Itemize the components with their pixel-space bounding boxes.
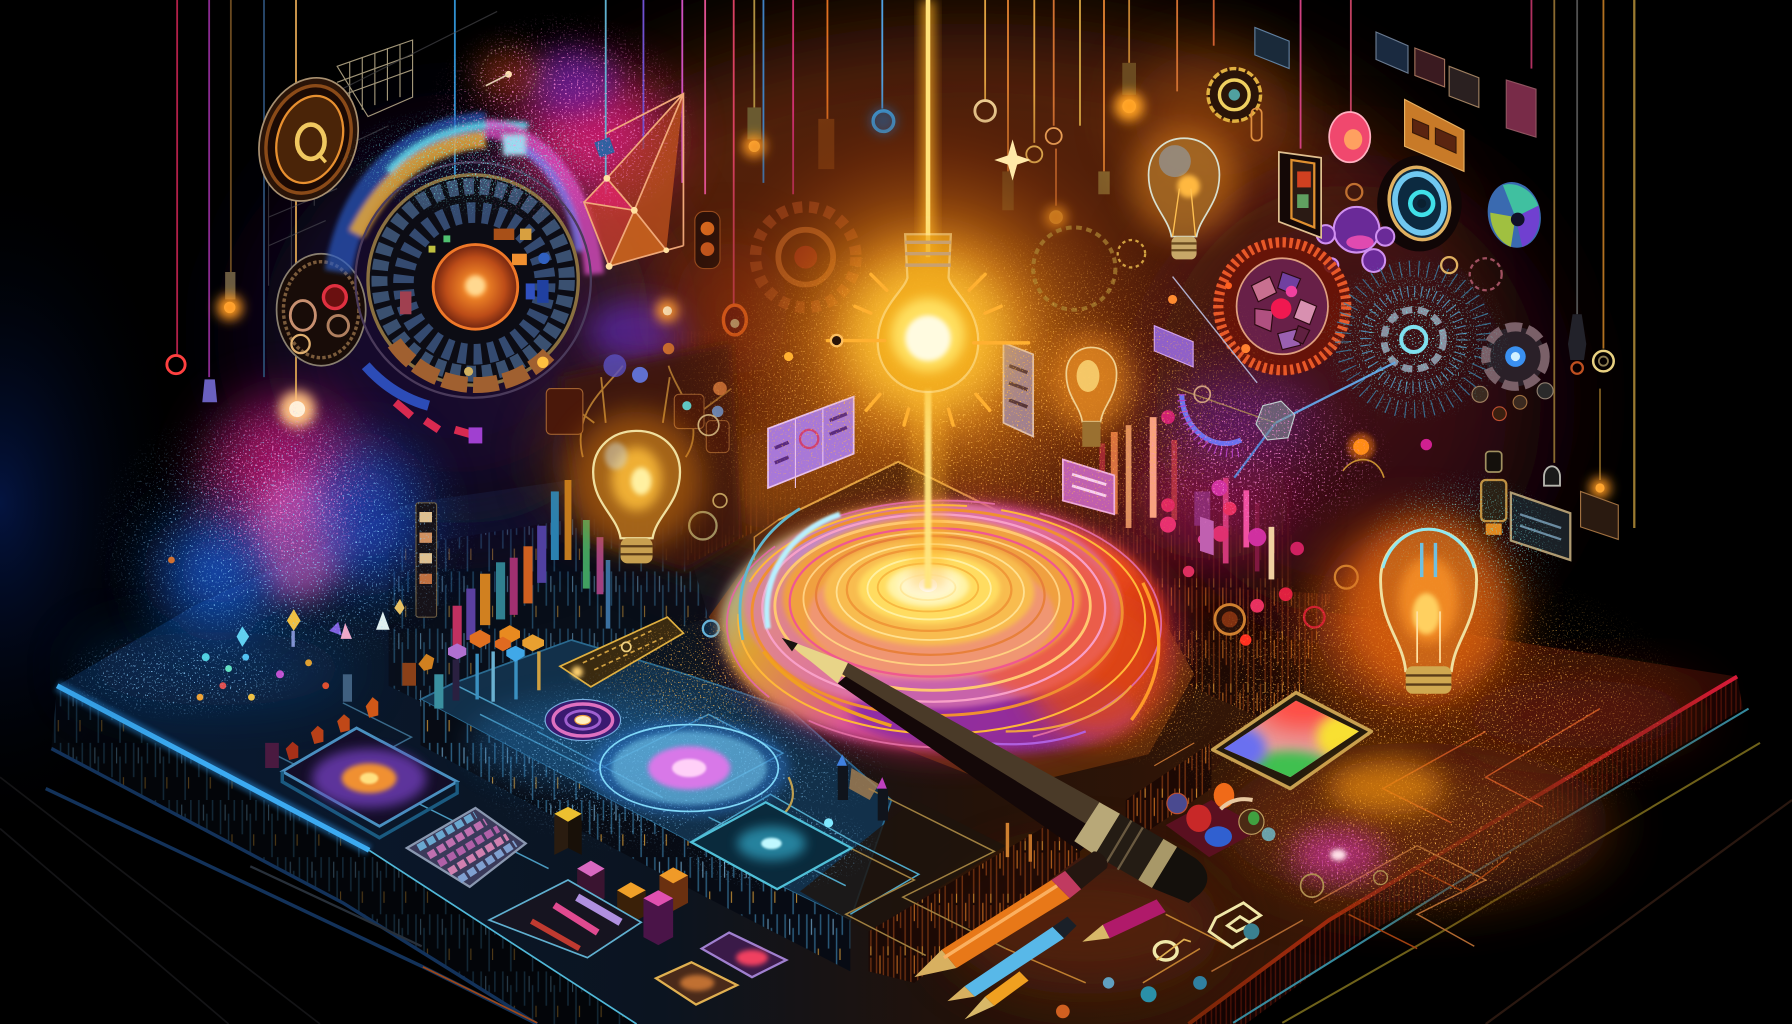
platform left side face: [51, 686, 637, 1024]
top-left dial: [243, 65, 374, 214]
outlined shapes on platform: [1154, 871, 1387, 960]
cube: pink: [577, 861, 605, 906]
paint blobs: [1166, 783, 1264, 857]
pencil: ferrule: [1074, 802, 1120, 855]
main light bulb: [784, 139, 1031, 425]
gauge colored tiles: [400, 229, 550, 376]
glowing spiral: [720, 501, 1183, 759]
large orange gauge: [338, 124, 594, 443]
circuit traces: [274, 683, 1600, 983]
gold chip panel: [560, 617, 719, 687]
platform tile: orange screen: [656, 962, 737, 1005]
light beam: [910, 0, 946, 589]
platform tile: nebula: [282, 728, 457, 838]
slab: front wall: [421, 699, 690, 889]
slab: second front wall: [690, 842, 850, 971]
platform glows: [1262, 760, 1446, 897]
colour pencils: [914, 851, 1166, 1019]
cube: orange: [617, 882, 646, 923]
pink and red bars right: [1099, 410, 1358, 646]
slab: warm deck: [800, 800, 1006, 931]
dial: pink disc: [1329, 112, 1370, 162]
right wall dials: [1033, 69, 1553, 478]
deck blue glow: [469, 697, 720, 789]
slab: main blue deck: [421, 640, 891, 920]
slab: warm ground stripes: [869, 806, 1080, 983]
dial: purple molecule: [1317, 207, 1394, 272]
ground details: [1006, 823, 1259, 1018]
pencil: magenta: [1082, 899, 1166, 942]
markers row: [168, 557, 443, 709]
small spirals on platform: [545, 699, 888, 889]
dial: blue starburst: [1343, 269, 1485, 410]
main pencil: [782, 638, 1207, 903]
gem tops: [265, 625, 544, 768]
pencil: body shadow side: [838, 674, 1109, 851]
platform right side face: [1189, 677, 1743, 1024]
dial: gold ring: [1208, 69, 1261, 121]
rainbow arc: [338, 124, 594, 274]
small rings: [1033, 184, 1502, 310]
bulb: top right: [1129, 128, 1239, 259]
dial: blue flower: [1472, 327, 1553, 421]
platform surface: [46, 457, 1792, 1024]
spiral streaks: [727, 501, 1161, 747]
spiral: cyan: [691, 802, 851, 889]
panel: tall card: [1003, 343, 1033, 437]
small chip: [1481, 451, 1506, 535]
dial: blue disc: [1377, 155, 1462, 251]
panel: pink list: [1063, 459, 1114, 514]
platform tile: magenta screen: [702, 933, 786, 977]
hanging wires with lights: [167, 0, 1634, 528]
pencil: body top side: [842, 663, 1102, 825]
back wall glow field: [160, 23, 1543, 709]
pencil: wood tip: [782, 638, 848, 683]
faint grid panel top-left: [269, 11, 497, 286]
spiral: blue and pink: [589, 720, 793, 825]
pencil: yellow: [965, 971, 1029, 1019]
mid-left gear cluster: [695, 207, 856, 335]
dial: red mandala: [1214, 238, 1351, 375]
pencil: orange: [914, 851, 1108, 977]
left small dial: [277, 254, 366, 366]
coloured cubes: [554, 807, 688, 945]
pencil: end cap: [1152, 847, 1207, 903]
floating data panels: [768, 326, 1618, 560]
bar city: [416, 480, 727, 702]
tiles top right: [1251, 27, 1536, 238]
warm striped walls: [389, 331, 1331, 731]
panel: purple chart: [768, 397, 854, 488]
colour tablet: [1210, 690, 1374, 790]
purple cluster and ornate panels behind left bulb: [537, 343, 743, 571]
bulb: large right: [1349, 517, 1509, 695]
main glow: [654, 74, 1202, 600]
cube: yellow: [554, 807, 582, 855]
spiral: purple: [545, 699, 621, 741]
spiral slab: [709, 462, 1194, 789]
bulb: center right: [1050, 335, 1133, 447]
cube: magenta: [643, 890, 673, 945]
slab: right ground stripes: [1126, 743, 1211, 846]
cube: orange tall: [659, 867, 688, 911]
light halos on wires: [217, 91, 1610, 498]
platform tile: pink stripes: [489, 880, 641, 958]
lamp bright spots: [289, 306, 672, 417]
platform tile: colour grid: [407, 808, 526, 887]
cool slabs: [274, 640, 1600, 983]
bright orbs: [1168, 282, 1432, 478]
pencil: blue: [947, 917, 1077, 1001]
bulb: left: [570, 411, 703, 563]
panel: dark screen: [1511, 493, 1570, 560]
dial: rainbow disc: [1482, 177, 1547, 253]
panel: violet card: [1154, 326, 1193, 367]
panel: dark box: [1581, 491, 1618, 539]
wireframe triangles: [481, 47, 683, 270]
dial: crystal node: [1173, 277, 1395, 478]
small black pens: [837, 754, 888, 821]
